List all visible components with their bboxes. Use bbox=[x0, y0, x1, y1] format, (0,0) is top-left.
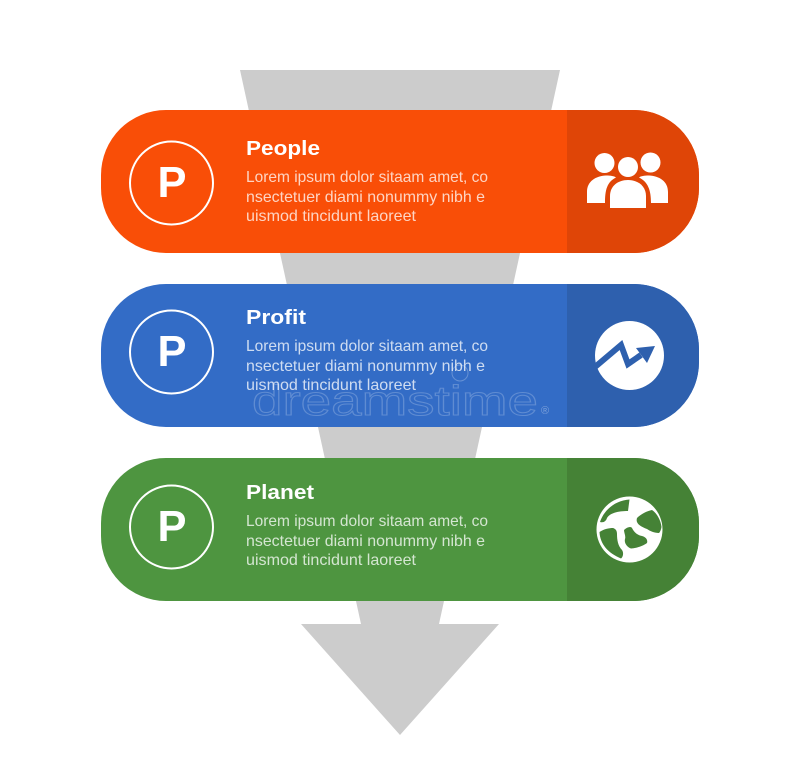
planet text bbox=[246, 513, 488, 569]
panel: people bbox=[101, 110, 699, 253]
profit badge: P bbox=[158, 327, 186, 376]
planet heading: Planet bbox=[246, 481, 314, 504]
icon: globe bbox=[596, 496, 662, 562]
watermark: dreamstime bbox=[252, 377, 538, 424]
profit band bbox=[101, 284, 699, 427]
funnel arrow bbox=[240, 70, 560, 735]
people heading: People bbox=[246, 137, 320, 160]
watermark bbox=[252, 365, 549, 424]
people text: uismod tincidunt laoreet bbox=[246, 208, 417, 225]
people badge: P bbox=[158, 158, 186, 207]
planet icon panel bbox=[567, 458, 699, 601]
profit heading: Profit bbox=[246, 306, 306, 329]
people band bbox=[101, 110, 699, 253]
panel: profit bbox=[101, 284, 699, 427]
people text: nsectetuer diami nonummy nibh e bbox=[246, 189, 485, 206]
profit text bbox=[246, 338, 488, 394]
icon: growth chart bbox=[595, 321, 664, 390]
panel: planet bbox=[101, 458, 699, 601]
profit badge bbox=[130, 310, 213, 394]
profit icon panel bbox=[567, 284, 699, 427]
profit text: nsectetuer diami nonummy nibh e bbox=[246, 358, 485, 375]
watermark: ® bbox=[541, 405, 549, 417]
people text bbox=[246, 169, 488, 225]
planet badge: P bbox=[158, 502, 186, 551]
icon: people group bbox=[587, 152, 668, 208]
people text: Lorem ipsum dolor sitaam amet, co bbox=[246, 169, 488, 186]
people badge bbox=[130, 142, 213, 224]
profit text: Lorem ipsum dolor sitaam amet, co bbox=[246, 338, 488, 355]
planet text: nsectetuer diami nonummy nibh e bbox=[246, 533, 485, 550]
planet band bbox=[101, 458, 699, 601]
planet badge bbox=[130, 486, 213, 568]
people icon panel bbox=[567, 110, 699, 253]
planet text: uismod tincidunt laoreet bbox=[246, 552, 417, 569]
profit text: uismod tincidunt laoreet bbox=[246, 377, 417, 394]
planet text: Lorem ipsum dolor sitaam amet, co bbox=[246, 513, 488, 530]
